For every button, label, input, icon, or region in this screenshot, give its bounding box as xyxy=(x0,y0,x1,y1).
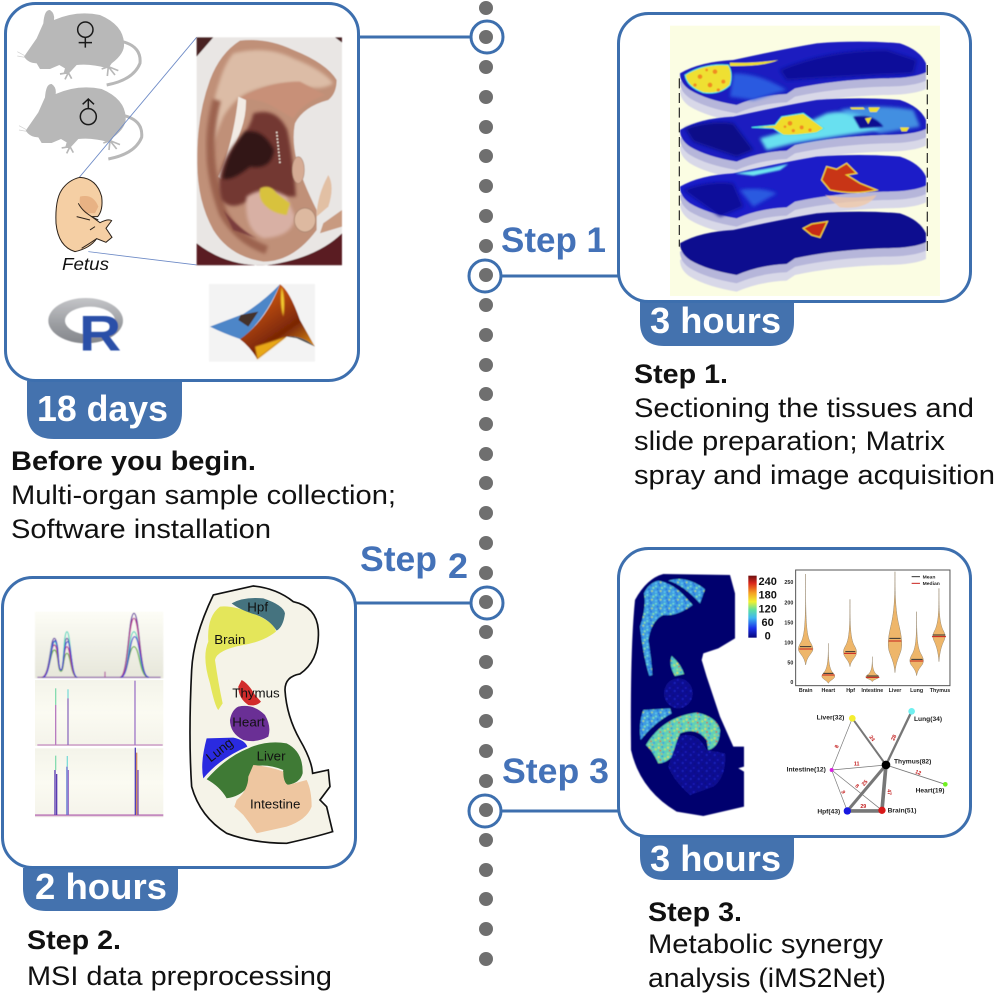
chart: violin plot: 150 xyxy=(784,620,793,626)
section 3: heart-region signal xyxy=(680,155,926,235)
text block: before you begin: Multi-organ sample collection; xyxy=(11,480,396,510)
chart: metabolic network: 11 xyxy=(854,762,859,768)
icon: R logo xyxy=(48,298,123,362)
heat map: tissue section xyxy=(631,574,744,816)
panel: step 2 data preprocessing xyxy=(2,578,356,868)
diagram: organ map xyxy=(190,586,333,843)
chart: violin plot xyxy=(784,570,950,694)
panel: step 3 metabolic synergy xyxy=(618,548,970,836)
icon: R logo: R xyxy=(79,306,121,362)
chart: metabolic network: Brain(51) xyxy=(888,807,916,814)
text block: step 2: MSI data preprocessing xyxy=(27,961,332,991)
icon: male mouse xyxy=(19,84,142,159)
caption: Fetus: Fetus xyxy=(62,254,109,274)
text block: step 2 xyxy=(27,925,332,991)
time tab: 3 hours step 1: 3 hours xyxy=(650,300,781,341)
text block: step 1 xyxy=(634,359,995,490)
chart: metabolic network: Heart(19) xyxy=(916,787,944,794)
panel: step 1 MSI stacked sections xyxy=(618,14,970,302)
text block: step 3 xyxy=(648,897,886,993)
violin legend xyxy=(912,574,940,587)
text block: step 3: Metabolic synergy xyxy=(648,929,884,959)
organ: heart: Heart xyxy=(232,715,265,730)
text block: step 1: Sectioning the tissues and xyxy=(634,393,974,423)
icon: MATLAB surface xyxy=(209,284,315,362)
organ: intestine: Intestine xyxy=(250,796,300,811)
organ: brain xyxy=(205,606,276,710)
text block: step 1: slide preparation; Matrix xyxy=(634,426,946,456)
chart: metabolic network: Hpf(43) xyxy=(817,808,840,815)
text block: before you begin: Software installation xyxy=(11,514,271,544)
chart: metabolic network: 8 xyxy=(834,744,841,750)
organ: liver xyxy=(207,742,303,798)
chart: metabolic network: Thymus(82) xyxy=(894,758,931,765)
section 1: brain signal xyxy=(680,42,926,122)
chart: metabolic network: Liver(32) xyxy=(817,715,844,722)
label: Step 3: Step 3 xyxy=(502,752,609,791)
label: Step 2: Step xyxy=(360,540,437,579)
chart: violin plot: Thymus xyxy=(930,688,950,694)
timeline rings and connectors xyxy=(356,21,618,827)
chart: violin plot: Lung xyxy=(910,688,923,694)
organ: liver: Liver xyxy=(257,749,286,764)
section 2: thymus-region signal xyxy=(680,98,926,178)
violin legend: Median xyxy=(923,581,940,587)
organ: brain: Brain xyxy=(214,632,245,647)
chart: violin plot: Intestine xyxy=(861,688,883,694)
chart: violin plot: Heart xyxy=(822,688,835,694)
chart: metabolic network: Intestine(12) xyxy=(787,767,826,774)
chart: violin plot: 0 xyxy=(790,680,793,686)
colour bar legend: 0 xyxy=(765,631,771,643)
photo: fetal tissue section xyxy=(197,37,342,265)
text block: before you begin xyxy=(11,446,396,544)
organ: Hpf xyxy=(232,598,285,631)
chart: violin plot: 100 xyxy=(784,640,793,646)
colour bar legend: 60 xyxy=(762,617,774,629)
panel: before you begin xyxy=(6,4,358,380)
colour bar legend: 240 xyxy=(758,576,777,588)
chart: metabolic network xyxy=(787,708,948,815)
label: Step 1: Step 1 xyxy=(501,221,606,260)
chart: metabolic network: 29 xyxy=(860,804,866,810)
text block: step 3: Step 3. xyxy=(648,897,742,927)
text block: step 1: Step 1. xyxy=(634,359,728,389)
text block: step 2: Step 2. xyxy=(27,925,121,955)
chart: aligned spectra xyxy=(35,748,163,817)
time tab: 18 days: 18 days xyxy=(37,388,168,429)
chart: raw spectra xyxy=(35,612,163,678)
organ: lung: Lung xyxy=(203,735,236,765)
section 4: small hot spot xyxy=(680,212,926,292)
chart: metabolic network: Lung(34) xyxy=(914,716,942,723)
time tab: 3 hours step 3: 3 hours xyxy=(650,838,781,879)
organ: lung xyxy=(202,735,247,778)
chart: centroided spectra xyxy=(35,680,163,746)
chart: violin plot: 200 xyxy=(784,600,793,606)
icon: fetus xyxy=(56,177,112,252)
organ: heart xyxy=(230,706,269,741)
label: Step 2: 2 xyxy=(448,547,468,586)
timeline: dotted line xyxy=(479,1,493,966)
organ: thymus xyxy=(232,680,280,705)
violin legend: Mean xyxy=(923,574,935,580)
chart: metabolic network: 8 xyxy=(854,783,860,790)
chart: metabolic network: 12 xyxy=(914,769,922,777)
label: Step 2 xyxy=(360,540,468,586)
time tab: 2 hours: 2 hours xyxy=(35,866,167,907)
organ: intestine xyxy=(234,765,312,833)
icon: female mouse xyxy=(17,10,140,85)
pointer lines to tissue photo xyxy=(79,37,197,265)
colour bar legend: 120 xyxy=(758,603,777,615)
text block: step 3: analysis (iMS2Net) xyxy=(648,963,886,993)
colour bar legend: 180 xyxy=(758,590,777,602)
text block: before you begin: Before you begin. xyxy=(11,446,256,476)
chart: violin plot: Liver xyxy=(889,688,901,694)
chart: violin plot: 250 xyxy=(784,580,793,586)
chart: metabolic network: 9 xyxy=(839,790,846,795)
chart: metabolic network: 28 xyxy=(890,734,898,742)
text block: step 1: spray and image acquisition xyxy=(634,460,995,490)
chart: violin plot: Hpf xyxy=(846,688,855,694)
dashed alignment lines xyxy=(679,65,927,255)
chart: metabolic network: 24 xyxy=(867,735,876,743)
time tab: 18 days xyxy=(27,381,182,439)
organ: thymus: Thymus xyxy=(232,685,280,700)
chart: metabolic network: 47 xyxy=(885,789,892,795)
colour bar legend xyxy=(748,576,777,643)
chart: metabolic network: 25 xyxy=(861,779,869,788)
organ: Hpf: Hpf xyxy=(247,599,268,614)
chart: violin plot: 50 xyxy=(787,660,793,666)
chart: violin plot: Brain xyxy=(799,688,812,694)
